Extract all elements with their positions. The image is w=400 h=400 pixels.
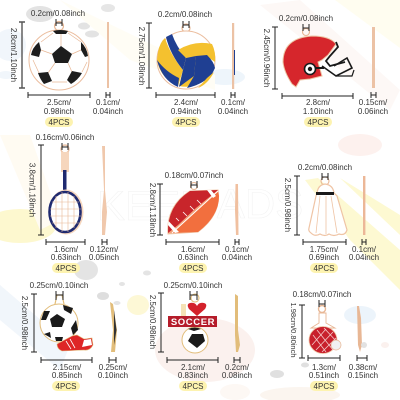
side view: [235, 184, 238, 235]
dimension: thickness: 0.38cm/: [349, 363, 378, 372]
dimension: width: [308, 355, 340, 380]
panel: volleyball charm: [137, 10, 248, 127]
dimension: width: 2.4cm/: [174, 98, 199, 107]
icon: heart, banner and ball: SOCCER: [171, 317, 215, 328]
dimension: width: 0.98inch: [44, 107, 74, 116]
dimension: width: 0.69inch: [309, 253, 339, 262]
dimension: top width: 0.25cm/0.10inch: [164, 281, 222, 290]
dimension: top width: 0.16cm/0.06inch: [36, 133, 94, 142]
dimension: top width: 0.2cm/0.08inch: [279, 14, 333, 23]
dimension: width: [41, 357, 92, 380]
quantity badge: 4PCS: [183, 264, 203, 273]
dimension: thickness: 0.04inch: [222, 253, 252, 262]
panel: american football charm: [148, 171, 252, 273]
dimension: width: [303, 239, 346, 262]
watermark: EP: [152, 182, 208, 229]
dimension: height: 2.5cm/0.98inch: [20, 296, 29, 350]
dimension: width: 1.3cm/: [312, 363, 337, 372]
side view: [110, 302, 117, 352]
dimension: thickness: [218, 92, 248, 116]
side view: [107, 22, 109, 88]
icon: american football: [168, 182, 219, 234]
dimension: height: 2.8cm/1.10inch: [9, 28, 18, 82]
dimension: width: [28, 92, 90, 116]
panel: soccer ball and boot charm: [20, 281, 128, 391]
icon: paddle and ball: [309, 306, 341, 354]
dimension: height: 1.98cm/0.80inch: [289, 302, 298, 358]
dimension: width: 1.6cm/: [181, 245, 206, 254]
icon: shuttlecock: [309, 177, 347, 236]
dimension: width: 0.85inch: [52, 371, 82, 380]
panel: I love soccer charm: [148, 281, 252, 391]
dimension: width: [166, 239, 219, 262]
dimension: width: [282, 93, 353, 116]
dimension: height: 2.75cm/1.08inch: [137, 27, 146, 85]
dimension: thickness: 0.15inch: [348, 371, 378, 380]
dimension: top width: 0.18cm/0.07inch: [293, 290, 351, 299]
panel: table tennis paddle charm: [289, 290, 378, 391]
watermark: [97, 180, 303, 229]
dimension: thickness: 0.25cm/: [99, 363, 128, 372]
dimension: thickness: 0.08inch: [222, 371, 252, 380]
quantity badge: 4PCS: [314, 264, 334, 273]
quantity badge: 4PCS: [49, 118, 69, 127]
dimension: width: 2.1cm/: [181, 363, 206, 372]
quantity badge: 4PCS: [56, 264, 76, 273]
icon: helmet: [283, 28, 354, 87]
side view: [357, 306, 367, 352]
dimension: thickness: 0.1cm/: [225, 245, 250, 254]
icon: racket: [48, 145, 84, 234]
dimension: width: 1.75cm/: [310, 245, 339, 254]
dimension: thickness: 0.1cm/: [352, 245, 377, 254]
dimension: thickness: 0.06inch: [358, 107, 388, 116]
dimension: thickness: 0.1cm/: [221, 98, 246, 107]
side view: [372, 27, 375, 88]
dimension: width: [46, 239, 85, 262]
quantity badge: 4PCS: [308, 118, 328, 127]
dimension: width: [167, 357, 218, 380]
dimension: height: 2.5cm/0.98inch: [148, 295, 157, 349]
dimension: thickness: 0.05inch: [89, 253, 119, 262]
watermark: ADS: [217, 180, 303, 227]
dimension: height: 2.5cm/0.98inch: [283, 178, 292, 232]
dimension: width: 0.83inch: [178, 371, 208, 380]
dimension: top width: 0.2cm/0.08inch: [158, 10, 212, 19]
dimension: thickness: [348, 355, 378, 380]
dimension: top width: 0.18cm/0.07inch: [165, 171, 223, 180]
dimension: width: 0.63inch: [51, 253, 81, 262]
dimension: width: [156, 92, 215, 116]
dimension: thickness: 0.04inch: [218, 107, 248, 116]
panel: football helmet charm: [262, 14, 388, 127]
dimension: width: 1.6cm/: [54, 245, 79, 254]
dimension: thickness: [222, 239, 252, 262]
dimension: top width: 0.2cm/0.08inch: [298, 163, 352, 172]
quantity badge: 4PCS: [56, 382, 76, 391]
panel: badminton racket charm: [28, 133, 119, 273]
dimension: thickness: 0.04inch: [349, 253, 379, 262]
dimension: thickness: [98, 357, 128, 380]
dimension: height: 2.45cm/0.96inch: [262, 29, 271, 87]
panel: shuttlecock charm: [283, 163, 379, 273]
side view: [363, 176, 365, 235]
dimension: width: 0.63inch: [178, 253, 208, 262]
quantity badge: 4PCS: [314, 382, 334, 391]
dimension: width: 2.8cm/: [306, 98, 331, 107]
side view: [102, 146, 107, 235]
dimension: thickness: [222, 357, 252, 380]
dimension: thickness: [349, 239, 379, 262]
dimension: thickness: [89, 239, 119, 262]
side view: [232, 23, 235, 89]
dimension: thickness: 0.04inch: [93, 107, 123, 116]
dimension: thickness: 0.2cm/: [225, 363, 250, 372]
dimension: top width: 0.25cm/0.10inch: [30, 281, 88, 290]
dimension: thickness: [93, 92, 123, 116]
dimension: width: 1.10inch: [303, 107, 333, 116]
dimension: thickness: 0.1cm/: [96, 98, 121, 107]
side view: [235, 294, 240, 352]
dimension: height: 2.8cm/1.18inch: [148, 183, 157, 237]
panel: soccer ball charm: [9, 9, 123, 127]
dimension: thickness: 0.15cm/: [359, 98, 388, 107]
dimension: width: 2.15cm/: [53, 363, 82, 372]
dimension: thickness: 0.12cm/: [90, 245, 119, 254]
dimension: width: 0.94inch: [171, 107, 201, 116]
quantity badge: 4PCS: [176, 118, 196, 127]
watermark: KE: [97, 182, 153, 229]
icon: volleyball: [157, 24, 215, 89]
dimension: width: 2.5cm/: [47, 98, 72, 107]
dimension: height: 3.8cm/1.18inch: [28, 163, 36, 217]
dimension: thickness: 0.10inch: [98, 371, 128, 380]
quantity badge: 4PCS: [183, 382, 203, 391]
icon: soccer ball: [29, 22, 89, 90]
dimension: top width: 0.2cm/0.08inch: [31, 9, 85, 18]
dimension: width: 0.51inch: [309, 371, 339, 380]
icon: ball and boot: [40, 295, 93, 351]
dimension: thickness: [358, 92, 388, 116]
